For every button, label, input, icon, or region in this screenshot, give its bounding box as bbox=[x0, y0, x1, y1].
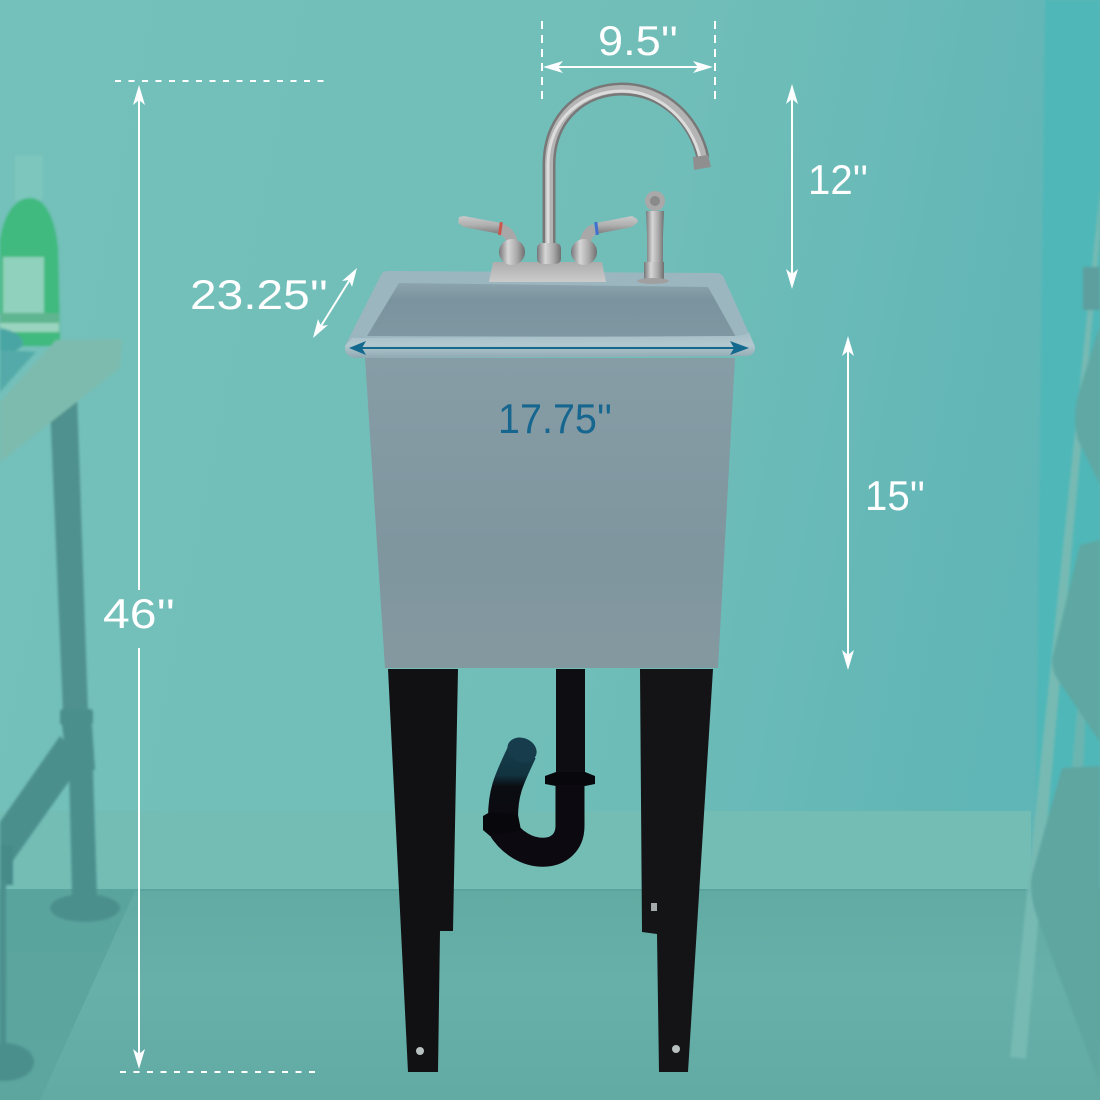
front rim lip bbox=[345, 332, 755, 358]
towels bbox=[0, 328, 36, 392]
right leg bolt bbox=[672, 1045, 680, 1053]
dimension: faucet height 12 inches bbox=[786, 84, 868, 289]
centre collar bbox=[537, 243, 561, 264]
slip nut bbox=[483, 812, 521, 836]
dimension: total height 46 inches: 46'' bbox=[103, 590, 175, 637]
table top bbox=[0, 339, 122, 462]
gooseneck spout bbox=[548, 89, 703, 248]
ladder shelf, right background bbox=[1010, 190, 1100, 1085]
dimension: depth front to back 23.25 inches: 23.25'' bbox=[190, 271, 328, 318]
dimension: spout reach 9.5 inches: 9.5'' bbox=[598, 17, 678, 64]
side sprayer bbox=[637, 191, 669, 284]
dimension: basin depth 15 inches bbox=[842, 336, 925, 670]
dimension: total height 46 inches bbox=[103, 81, 330, 1072]
sink inner basin bbox=[367, 283, 736, 337]
dimension: width 17.75 inches: 17.75'' bbox=[498, 395, 612, 442]
dimension: basin depth 15 inches: 15'' bbox=[865, 472, 925, 519]
spout tip bbox=[693, 155, 711, 170]
U bend bbox=[501, 785, 570, 852]
left leg bolt bbox=[416, 1047, 424, 1055]
faucet bbox=[458, 89, 711, 284]
flange nut bbox=[545, 772, 595, 786]
shelf with bottle and towels, left background bbox=[0, 155, 122, 712]
dimension: faucet height 12 inches: 12'' bbox=[808, 156, 868, 203]
right leg bbox=[640, 669, 713, 1072]
right handle bbox=[571, 216, 638, 265]
P-trap drain pipe bbox=[483, 669, 595, 852]
sink legs bbox=[388, 669, 713, 1072]
left leg bbox=[388, 669, 458, 1072]
icon: green bottle bbox=[0, 155, 60, 346]
outlet end cap bbox=[504, 733, 540, 767]
sink top rim bbox=[345, 271, 755, 358]
sink basin body bbox=[365, 358, 735, 668]
right bracket bolt bbox=[651, 903, 657, 911]
dimension: spout reach 9.5 inches bbox=[542, 17, 715, 105]
utility sink bbox=[345, 271, 755, 668]
table leg upper bbox=[50, 395, 88, 712]
dimension: depth front to back 23.25 inches bbox=[190, 268, 357, 338]
deck plate bbox=[489, 262, 606, 282]
dimension: width 17.75 inches bbox=[349, 341, 749, 442]
vertical tailpiece bbox=[556, 669, 585, 781]
upper elbow bbox=[503, 752, 522, 818]
left handle bbox=[458, 216, 525, 265]
pipe table frame, left background bbox=[0, 709, 120, 1081]
